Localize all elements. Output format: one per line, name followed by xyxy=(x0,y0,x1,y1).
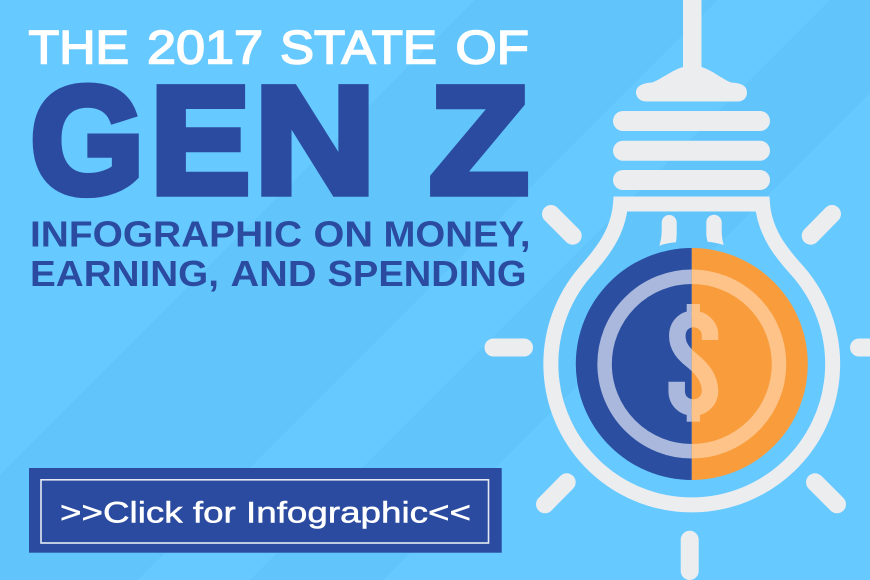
coin right half xyxy=(692,248,808,480)
subtitle: AND xyxy=(230,253,316,294)
subtitle: EARNING, xyxy=(30,253,219,294)
title: the 2017 state of: THE xyxy=(28,22,129,75)
bulb filaments xyxy=(659,215,724,246)
title: the 2017 state of xyxy=(28,22,529,75)
heading: gen z: Z xyxy=(430,56,528,226)
button: click for infographic: >>Click for Infographic<< xyxy=(60,496,471,530)
bulb cord and cap xyxy=(636,0,747,102)
heading: gen z: G xyxy=(30,56,144,226)
heading: gen z xyxy=(30,56,528,226)
bulb screw coils xyxy=(613,111,770,190)
coin left half xyxy=(576,248,692,480)
subtitle xyxy=(30,214,530,294)
light rays xyxy=(494,214,870,571)
subtitle: MONEY, xyxy=(384,214,530,255)
subtitle: SPENDING xyxy=(328,253,526,294)
subtitle: ON xyxy=(314,214,373,255)
heading: gen z: N xyxy=(254,56,376,226)
title: the 2017 state of: STATE xyxy=(280,22,437,75)
heading: gen z: E xyxy=(150,56,250,226)
button: click for infographic xyxy=(29,468,502,553)
title: the 2017 state of: 2017 xyxy=(147,22,263,75)
bulb outline xyxy=(551,204,833,505)
title: the 2017 state of: OF xyxy=(456,22,529,75)
icon: light bulb with coin xyxy=(494,0,870,571)
subtitle: INFOGRAPHIC xyxy=(30,214,302,255)
